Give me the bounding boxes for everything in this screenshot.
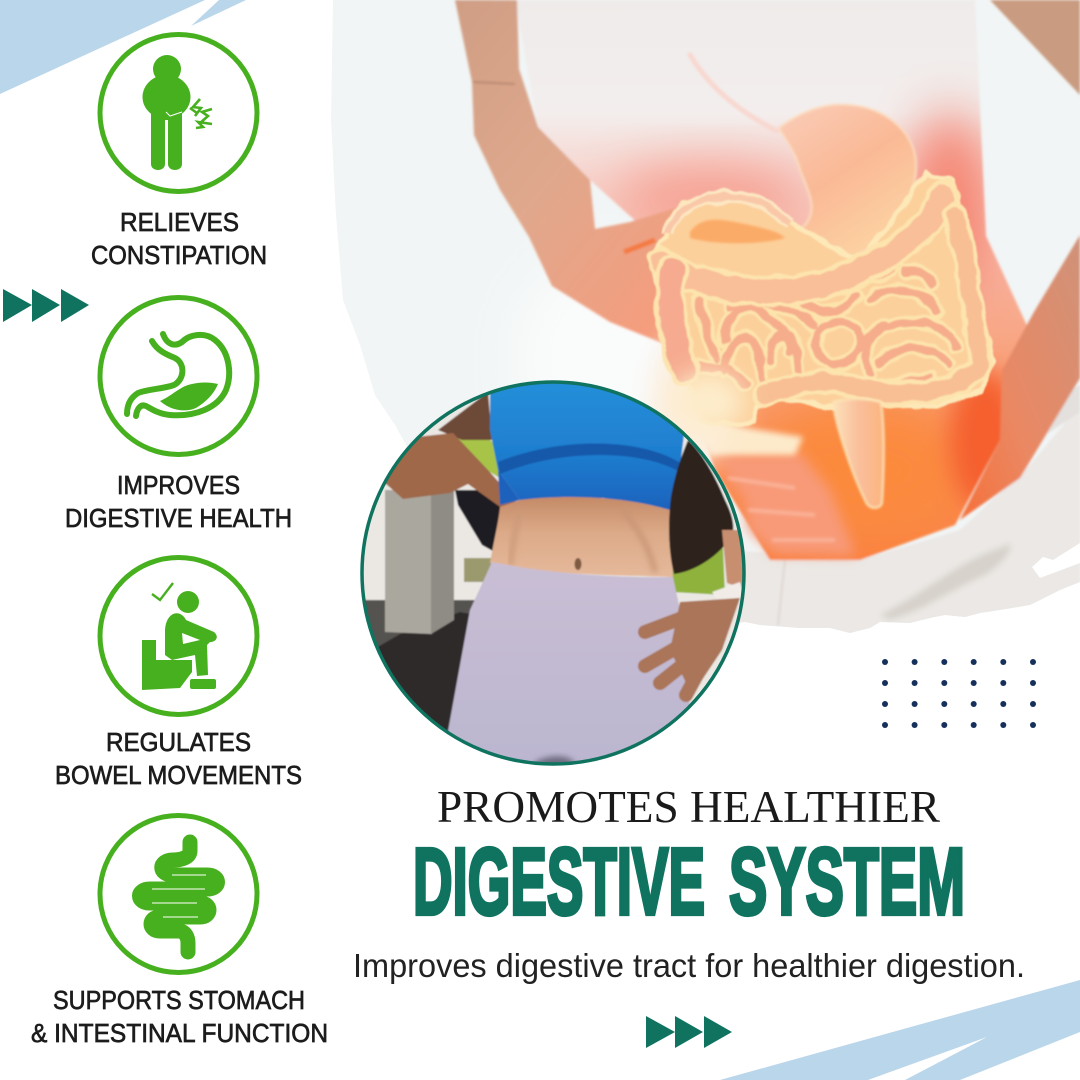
benefit 4: supports stomach and intestinal function bbox=[31, 816, 328, 1048]
photo background bbox=[364, 394, 738, 704]
pointing hand and arm bbox=[386, 395, 516, 508]
left arm and hand bbox=[455, 0, 682, 347]
icon: intestines bbox=[100, 816, 257, 972]
label: relieves constipation: RELIEVES bbox=[120, 207, 239, 237]
label: regulates bowel movements bbox=[55, 727, 302, 790]
label: regulates bowel movements: BOWEL MOVEMENTS bbox=[55, 760, 302, 790]
blue sports top bbox=[490, 375, 690, 510]
top-left blue brush corner bbox=[0, 0, 246, 94]
benefit 2: improves digestive health bbox=[65, 298, 292, 533]
leggings bbox=[447, 562, 690, 762]
navel bbox=[574, 558, 582, 570]
pants bbox=[730, 385, 1080, 640]
pale lower left lump bbox=[672, 372, 744, 432]
red and orange glow bbox=[615, 110, 1021, 540]
right forearm bbox=[960, 235, 1080, 520]
label: relieves constipation: CONSTIPATION bbox=[91, 240, 267, 270]
hole under stomach bbox=[690, 220, 785, 243]
label: supports stomach and intestinal function: & INTESTINAL FUNCTION bbox=[31, 1018, 328, 1048]
arrows: left triple chevron bbox=[3, 289, 89, 322]
heading: digestive system: DIGESTIVE bbox=[413, 829, 705, 935]
torso skin bbox=[490, 497, 673, 577]
wrist band and right hand bbox=[645, 530, 748, 695]
icon: person on toilet with check mark bbox=[100, 558, 257, 714]
benefit 3: regulates bowel movements bbox=[55, 558, 302, 790]
hair bbox=[669, 440, 733, 574]
circular inset photo bbox=[355, 375, 751, 775]
heading: promotes healthier: PROMOTES HEALTHIER bbox=[437, 782, 940, 832]
icon: stomach bbox=[100, 298, 257, 454]
decorative dots grid bbox=[882, 659, 1036, 728]
green foliage bbox=[458, 438, 500, 478]
label: improves digestive health bbox=[65, 470, 292, 533]
pale fade near circle bbox=[652, 330, 728, 470]
gym dark structure bbox=[455, 490, 500, 555]
benefit 1: relieves constipation bbox=[91, 34, 267, 270]
label: improves digestive health: IMPROVES bbox=[117, 470, 240, 500]
upper right arm bbox=[990, 0, 1080, 95]
label: regulates bowel movements: REGULATES bbox=[106, 727, 251, 757]
lower hand palm and fingers bbox=[690, 415, 856, 556]
esophagus and stomach bbox=[689, 53, 916, 273]
arrows: bottom triple chevron bbox=[646, 1016, 732, 1048]
white paint streak bbox=[1032, 543, 1080, 578]
bottom-right blue brush corner bbox=[720, 980, 1080, 1080]
torso and shirt bbox=[515, 0, 1029, 560]
icon: person with stomach pain bbox=[100, 34, 257, 192]
intestines bbox=[651, 172, 993, 427]
label: relieves constipation bbox=[91, 207, 267, 270]
hero photo: woman holding abdomen with glowing digestive system bbox=[320, 0, 1080, 640]
appendix bbox=[833, 399, 884, 508]
concrete pillar bbox=[385, 490, 432, 634]
label: supports stomach and intestinal function: SUPPORTS STOMACH bbox=[53, 985, 305, 1015]
label: supports stomach and intestinal function bbox=[31, 985, 328, 1048]
subtitle: Improves digestive tract for healthier digestion. bbox=[353, 947, 1025, 984]
label: improves digestive health: DIGESTIVE HEALTH bbox=[65, 503, 292, 533]
inset photo ring bbox=[362, 382, 744, 764]
